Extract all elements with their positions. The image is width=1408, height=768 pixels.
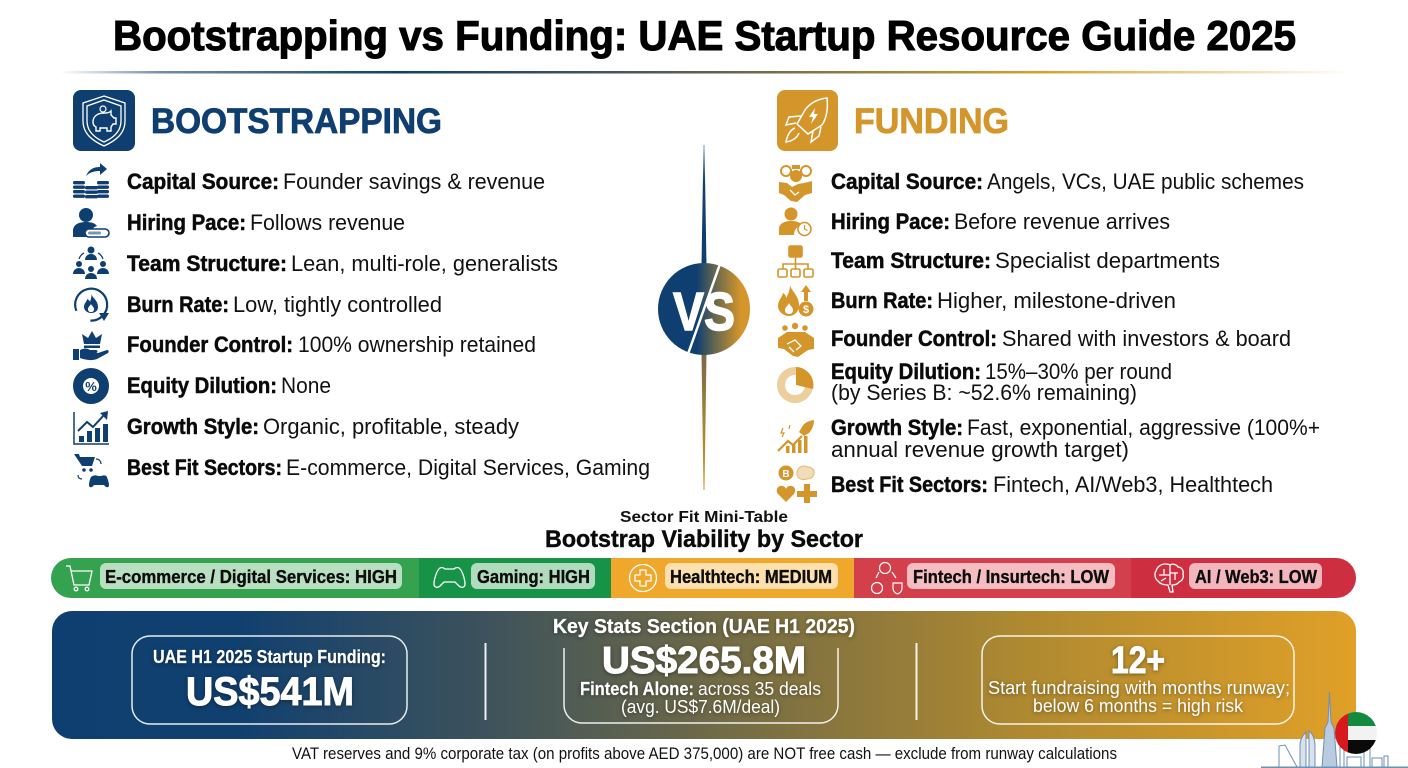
segment: ai web3: AI / Web3: LOW <box>1195 567 1317 587</box>
row: burn rate <box>70 282 442 325</box>
stat: total funding: US$541M <box>186 670 354 714</box>
text: team structure: Team Structure: <box>831 248 991 273</box>
icon: coin stacks <box>73 163 109 198</box>
stat: runway: 12+ <box>1111 640 1165 682</box>
stat: runway: below 6 months = high risk <box>1033 696 1244 716</box>
icon: gamepad <box>434 568 465 587</box>
icon: org chart <box>778 246 813 277</box>
uae flag <box>1335 712 1377 755</box>
stat: runway: Start fundraising with months runway; <box>988 678 1290 698</box>
text: best fit sectors: Best Fit Sectors: <box>127 455 282 480</box>
icon: flame with dollar: $ <box>803 304 809 316</box>
icon: crown over hand <box>73 331 109 360</box>
icon: cart and gamepad <box>74 454 109 487</box>
icon: team handshake <box>778 323 814 357</box>
row: equity dilution <box>78 373 331 399</box>
segment: healthtech: Healthtech: MEDIUM <box>670 567 832 587</box>
text: team structure: Specialist departments <box>995 248 1220 273</box>
icon: percent donut: % <box>85 379 97 394</box>
icon: percent donut <box>78 373 104 399</box>
icon: flame with dollar <box>778 285 814 316</box>
panel: bootstrapping <box>70 90 650 487</box>
heading: bootstrapping: BOOTSTRAPPING <box>151 102 442 141</box>
sector table heading <box>545 509 863 553</box>
footer note: VAT reserves and 9% corporate tax (on profits above AED 375,000) are NOT free cash — exclude from runway calculations <box>292 744 1117 763</box>
panel: funding <box>777 90 1320 503</box>
icon: money bags and handshake <box>779 165 812 202</box>
row: founder control <box>778 323 1291 357</box>
icon: rocket growth <box>778 420 814 453</box>
text: capital source <box>127 169 545 194</box>
icon: medical cross <box>630 564 656 592</box>
text: burn rate: Burn Rate: <box>831 288 933 313</box>
row: equity dilution <box>781 359 1172 405</box>
text: hiring pace: Follows revenue <box>250 210 405 235</box>
row: growth style <box>74 411 519 444</box>
row: capital source <box>73 163 545 198</box>
text: capital source: Angels, VCs, UAE public schemes <box>987 169 1304 194</box>
text: growth style: Fast, exponential, aggressive (100%+ <box>967 415 1320 440</box>
text: growth style: Organic, profitable, steady <box>263 414 519 439</box>
text: founder control: Founder Control: <box>127 332 293 357</box>
sector table heading: Bootstrap Viability by Sector <box>545 526 863 553</box>
vs divider: VS <box>673 282 735 342</box>
row: best fit sectors <box>74 454 650 487</box>
bootstrap viability band <box>51 558 1356 598</box>
icon: coin brain heart plus: B <box>782 469 790 480</box>
text: best fit sectors: Fintech, AI/Web3, Healthtech <box>993 472 1273 497</box>
text: founder control <box>127 332 536 357</box>
segment: fintech: Fintech / Insurtech: LOW <box>913 567 1109 587</box>
text: team structure: Lean, multi-role, generalists <box>291 251 558 276</box>
text: capital source <box>831 169 1304 194</box>
text: best fit sectors <box>831 472 1273 497</box>
text: capital source: Founder savings & revenue <box>283 169 545 194</box>
sector table heading: Sector Fit Mini-Table <box>620 509 788 526</box>
text: hiring pace: Before revenue arrives <box>954 209 1170 234</box>
skyline <box>1279 692 1388 767</box>
segment: ai web3 <box>1131 558 1356 598</box>
vs divider <box>658 145 750 490</box>
segment: healthtech <box>611 558 854 598</box>
icon: rocket <box>777 90 838 151</box>
text: growth style <box>127 414 519 439</box>
text: equity dilution: None <box>281 373 331 398</box>
text: founder control: Shared with investors & board <box>1002 326 1291 351</box>
row: team structure <box>73 246 558 279</box>
text: capital source: Capital Source: <box>831 169 983 194</box>
text: equity dilution: Equity Dilution: <box>127 373 277 398</box>
text: founder control: 100% ownership retained <box>298 332 536 357</box>
icon: dubai skyline and uae flag <box>1261 692 1408 768</box>
row: hiring pace <box>779 208 1170 236</box>
text: team structure: Team Structure: <box>127 251 287 276</box>
stat: fintech: across 35 deals <box>698 679 821 699</box>
icon: pie chart <box>781 367 813 399</box>
icon: growth chart <box>74 411 109 444</box>
row: capital source <box>779 165 1304 202</box>
stat: fintech <box>564 640 838 723</box>
row: burn rate <box>778 285 1176 316</box>
text: hiring pace <box>831 209 1170 234</box>
row: team structure <box>778 246 1220 277</box>
text: best fit sectors: E-commerce, Digital Services, Gaming <box>286 455 650 480</box>
icon: person with progress bar <box>73 208 109 237</box>
icon: cart <box>66 566 92 591</box>
stat: fintech: (avg. US$7.6M/deal) <box>621 697 780 717</box>
row: growth style <box>778 415 1320 462</box>
icon: team circle <box>73 246 109 279</box>
stat: fintech: Fintech Alone: <box>580 679 694 699</box>
title: Bootstrapping vs Funding: UAE Startup Resource Guide 2025 <box>113 12 1296 59</box>
segment: fintech <box>854 558 1131 598</box>
row: founder control <box>73 331 536 360</box>
icon: coin brain heart plus <box>777 466 817 503</box>
text: founder control: Founder Control: <box>831 326 997 351</box>
segment: e-commerce <box>51 558 419 598</box>
text: burn rate <box>127 292 442 317</box>
icon: flame in circular arrow <box>70 282 113 325</box>
segment: gaming: Gaming: HIGH <box>477 567 590 587</box>
heading: key stats: Key Stats Section (UAE H1 2025) <box>553 616 855 638</box>
text: best fit sectors <box>127 455 650 480</box>
text: team structure <box>127 251 558 276</box>
text: burn rate: Higher, milestone-driven <box>937 288 1176 313</box>
text: burn rate: Burn Rate: <box>127 292 229 317</box>
text: hiring pace: Hiring Pace: <box>127 210 246 235</box>
text: founder control <box>831 326 1291 351</box>
text: capital source: Capital Source: <box>127 169 279 194</box>
text: growth style: Growth Style: <box>831 415 963 440</box>
row: best fit sectors <box>777 466 1273 503</box>
row: hiring pace <box>73 208 405 237</box>
text: best fit sectors: Best Fit Sectors: <box>831 472 988 497</box>
icon: fintech cycle <box>872 562 902 594</box>
heading: funding: FUNDING <box>854 102 1009 141</box>
segment: gaming <box>419 558 611 598</box>
stat: total funding: UAE H1 2025 Startup Funding: <box>153 647 386 667</box>
text: burn rate: Low, tightly controlled <box>233 292 442 317</box>
icon: piggy bank shield <box>73 90 135 151</box>
text: equity dilution <box>831 359 1172 405</box>
text: team structure <box>831 248 1220 273</box>
text: equity dilution: 15%–30% per round <box>985 359 1172 384</box>
text: hiring pace <box>127 210 405 235</box>
text: growth style: Growth Style: <box>127 414 259 439</box>
stat: runway <box>982 636 1294 724</box>
text: equity dilution: Equity Dilution: <box>831 359 981 384</box>
stat: fintech: US$265.8M <box>602 640 806 682</box>
segment: e-commerce: E-commerce / Digital Services: HIGH <box>105 567 397 587</box>
icon: brain <box>1155 564 1183 592</box>
panel: key stats <box>52 611 1356 739</box>
text: burn rate <box>831 288 1176 313</box>
text: growth style: annual revenue growth target) <box>831 437 1129 462</box>
icon: person with clock <box>779 208 811 236</box>
text: hiring pace: Hiring Pace: <box>831 209 950 234</box>
text: growth style <box>831 415 1320 462</box>
stat: total funding <box>132 636 407 724</box>
text: equity dilution: (by Series B: ~52.6% remaining) <box>831 380 1137 405</box>
